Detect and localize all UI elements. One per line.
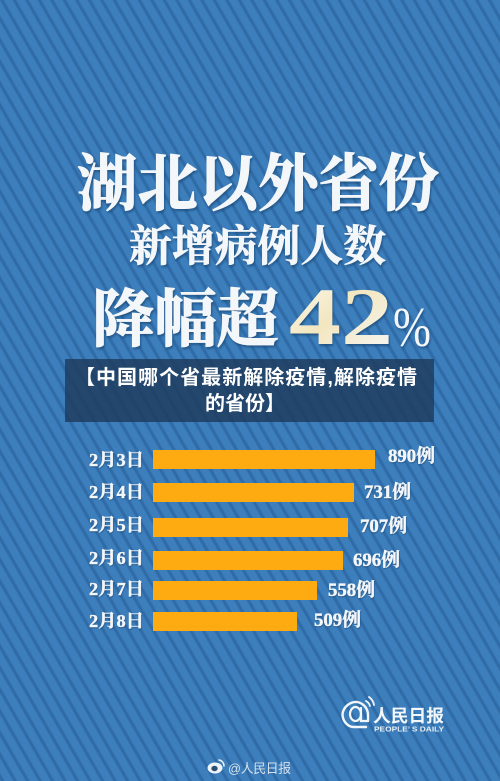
row: 2月4日 731例: 731例 — [364, 482, 411, 503]
row: 2月7日 558例 — [89, 579, 375, 601]
heading: 降幅超 42%: 降幅超 — [92, 285, 279, 355]
row: 2月6日 696例: 696例 — [353, 550, 400, 571]
row: 2月5日 707例: 707例 — [360, 516, 407, 537]
heading: 降幅超 42% — [92, 271, 431, 362]
row: 2月5日 707例: 2月5日 — [89, 515, 144, 535]
watermark: Weibo @人民日报 — [208, 760, 291, 776]
logo subtitle: PEOPLE’ S DAILY — [374, 724, 444, 734]
row: 2月6日 696例: 2月6日 — [89, 548, 144, 568]
row: 2月4日 731例: 2月4日 — [89, 482, 144, 502]
banner line 2: 的省份】 — [205, 392, 285, 415]
row: 2月8日 509例: 2月8日 — [89, 611, 144, 631]
logo wordmark: 人民日报 — [373, 706, 445, 726]
row: 2月7日 558例: 558例 — [328, 580, 375, 601]
row: 2月3日 890例 — [89, 446, 435, 470]
row: 2月8日 509例: 509例 — [314, 610, 361, 631]
bar chart: daily new cases — [89, 446, 435, 631]
row: 2月8日 509例 — [89, 610, 361, 631]
banner line 1: 【中国哪个省最新解除疫情,解除疫情 — [75, 365, 417, 389]
icon: Weibo — [208, 760, 224, 774]
row: 2月5日 707例 — [89, 515, 407, 537]
subheading: 新增病例人数: 新增病例人数 — [129, 223, 386, 271]
row: 2月3日 890例: 890例 — [388, 446, 435, 467]
title overlay banner — [65, 359, 434, 422]
watermark text: @人民日报 — [228, 761, 291, 776]
heading: 降幅超 42%: % — [393, 297, 431, 359]
logo: People's Daily — [342, 697, 445, 734]
row: 2月6日 696例 — [89, 548, 400, 571]
row: 2月4日 731例 — [89, 482, 411, 503]
heading: 降幅超 42%: 42 — [289, 271, 393, 362]
row: 2月7日 558例: 2月7日 — [89, 579, 144, 599]
row: 2月3日 890例: 2月3日 — [89, 450, 144, 470]
icon: at sign with signal arcs — [342, 697, 374, 727]
heading: 湖北以外省份: 湖北以外省份 — [77, 151, 439, 219]
